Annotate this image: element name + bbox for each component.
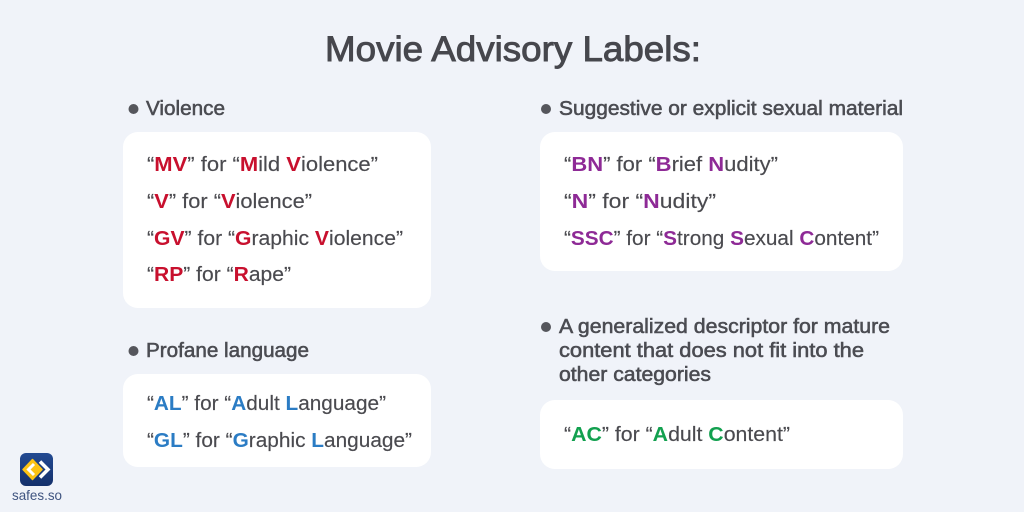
heading: sexual material: Suggestive or explicit sexual material: [559, 98, 903, 120]
card: violence labels: “RP” for “Rape”: [147, 263, 291, 286]
card: sexual labels: “SSC” for “Strong Sexual Content”: [564, 227, 879, 250]
heading: violence: Violence: [146, 98, 225, 120]
panel: profane language: [123, 340, 431, 467]
logo: safes.so: [12, 453, 62, 503]
heading: profane language: Profane language: [146, 340, 309, 362]
card: sexual labels: “N” for “ Nudity”: [564, 190, 716, 213]
card: language labels: “GL” for “Graphic Language”: [147, 429, 412, 452]
card: violence labels: [123, 132, 431, 308]
panel: mature content: [540, 316, 903, 469]
heading: mature content: other categories: [559, 364, 711, 386]
card: violence labels: “MV” for “Mild Violence”: [147, 153, 378, 176]
card: language labels: “AL” for “Adult Language”: [147, 392, 386, 415]
title: Movie Advisory Labels:: [325, 30, 701, 69]
card: adult content label: “AC” for “Adult Content”: [564, 423, 790, 446]
card: adult content label: [540, 400, 903, 469]
heading: mature content: content that does not fit into the: [559, 340, 864, 362]
card: language labels: [123, 374, 431, 467]
card: sexual labels: “BN” for “Brief Nudity”: [564, 153, 778, 176]
heading: mature content: A generalized descriptor for mature: [559, 316, 890, 338]
card: violence labels: “V” for “Violence”: [147, 190, 312, 213]
card: sexual labels: [540, 132, 903, 271]
icon: logo mark: [20, 453, 53, 486]
panel: sexual material: [540, 98, 903, 271]
heading: mature content: [541, 316, 890, 386]
card: violence labels: “GV” for “Graphic Violence”: [147, 227, 403, 250]
brand name: safes.so: [12, 487, 62, 503]
panel: violence: [123, 98, 431, 308]
